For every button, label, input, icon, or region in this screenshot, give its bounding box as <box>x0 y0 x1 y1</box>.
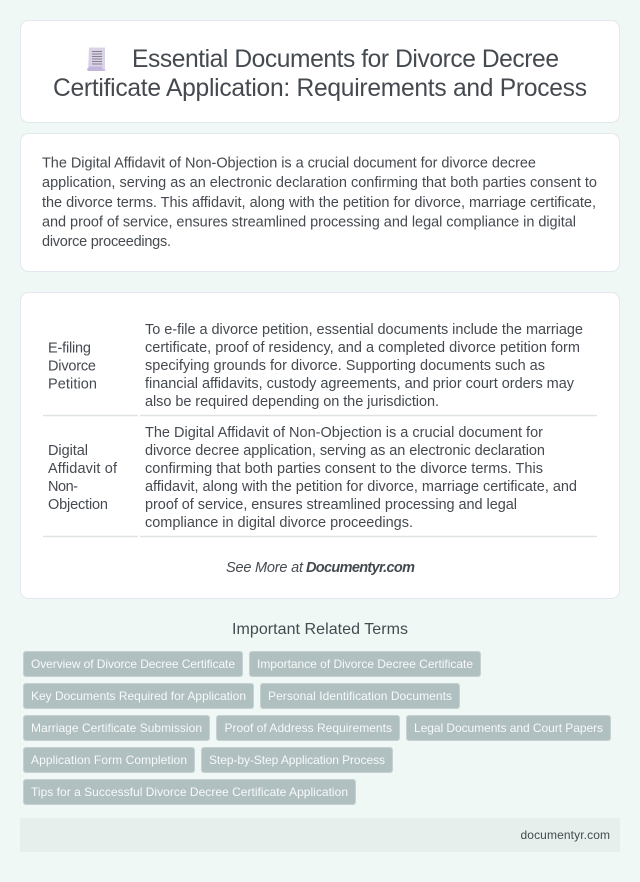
text block: introduction <box>42 156 597 250</box>
tag: Personal Identification Documents <box>260 684 460 708</box>
row text: E-filing Divorce Petition: also be required depending on the jurisdiction. <box>145 394 439 410</box>
title: Essential Documents for Divorce Decree <box>132 46 559 73</box>
row text: Digital Affidavit of Non-Objection: affidavit, along with the petition for divorce, marriage certificate, and <box>145 479 577 495</box>
row label: E-filing Divorce Petition: Petition <box>48 376 97 392</box>
row text: E-filing Divorce Petition: financial affidavits, custody agreements, and prior court orders may <box>145 376 575 392</box>
row label: Digital Affidavit of Non-Objection: Non- <box>48 479 78 495</box>
tag: Legal Documents and Court Papers <box>406 716 610 740</box>
row text: Digital Affidavit of Non-Objection: confirming that both parties consent to the divorce terms. This <box>145 461 543 477</box>
icon: document scroll <box>87 48 106 71</box>
tag: Tips for a Successful Divorce Decree Certificate Application <box>24 780 356 804</box>
row text: Digital Affidavit of Non-Objection <box>145 425 577 531</box>
tag: Overview of Divorce Decree Certificate <box>24 652 242 676</box>
see more link: Documentyr.com <box>306 560 415 576</box>
row label: Digital Affidavit of Non-Objection <box>48 443 118 513</box>
see more link: See More at <box>226 560 304 576</box>
row label: Digital Affidavit of Non-Objection: Affidavit of <box>48 461 118 477</box>
text block: introduction: and proof of service, ensures streamlined processing and legal compliance in digital <box>42 214 576 230</box>
row label: Digital Affidavit of Non-Objection: Objection <box>48 497 108 513</box>
tag: Application Form Completion: Application Form Completion <box>31 753 187 767</box>
row text: Digital Affidavit of Non-Objection: proof of service, ensures streamlined processing and legal <box>145 497 517 513</box>
panel: introduction <box>20 134 620 272</box>
panel: header <box>20 20 620 122</box>
tag: Personal Identification Documents: Personal Identification Documents <box>268 689 452 703</box>
text block: introduction: divorce proceedings. <box>42 234 171 250</box>
row label: E-filing Divorce Petition <box>48 340 97 392</box>
row text: E-filing Divorce Petition: certificate, proof of residency, and a completed divorce petition form <box>145 340 580 356</box>
tag: Marriage Certificate Submission <box>24 716 210 740</box>
tag: Proof of Address Requirements <box>216 716 400 740</box>
heading: Important Related Terms: Important Related Terms <box>232 621 408 638</box>
row text: E-filing Divorce Petition <box>145 322 583 410</box>
row label: E-filing Divorce Petition: Divorce <box>48 358 96 374</box>
tag: Proof of Address Requirements: Proof of Address Requirements <box>224 721 392 735</box>
row label: E-filing Divorce Petition: E-filing <box>48 340 91 356</box>
tag: Application Form Completion <box>24 748 194 772</box>
tag: Key Documents Required for Application: Key Documents Required for Application <box>31 689 246 703</box>
text block: introduction: the divorce terms. This affidavit, along with the petition for divorce, marriage certificate, <box>42 195 596 211</box>
row text: E-filing Divorce Petition: specifying grounds for divorce. Supporting documents such as <box>145 358 545 374</box>
tag: Overview of Divorce Decree Certificate: Overview of Divorce Decree Certificate <box>31 657 235 671</box>
text block: introduction: application, serving as an electronic declaration confirming that both parties consent to <box>42 175 597 191</box>
table row: E-filing Divorce Petition <box>43 322 597 416</box>
tag: Legal Documents and Court Papers: Legal Documents and Court Papers <box>414 721 603 735</box>
tag: Step-by-Step Application Process: Step-by-Step Application Process <box>209 753 385 767</box>
title <box>53 46 587 102</box>
tag: Key Documents Required for Application <box>24 684 254 708</box>
panel: documents table <box>20 292 620 598</box>
row text: Digital Affidavit of Non-Objection: compliance in digital divorce proceedings. <box>145 515 413 531</box>
tag: Importance of Divorce Decree Certificate <box>250 652 480 676</box>
see more link <box>226 560 415 576</box>
title: Certificate Application: Requirements and Process <box>53 75 587 102</box>
table row: Digital Affidavit of Non-Objection <box>43 425 597 536</box>
footer: documentyr.com <box>520 828 610 842</box>
row text: Digital Affidavit of Non-Objection: The Digital Affidavit of Non-Objection is a crucial document for <box>145 425 543 441</box>
footer <box>20 818 620 852</box>
text block: introduction: The Digital Affidavit of Non-Objection is a crucial document for divorce decree <box>42 156 536 172</box>
tag: Step-by-Step Application Process <box>202 748 392 772</box>
row text: E-filing Divorce Petition: To e-file a divorce petition, essential documents include the marriage <box>145 322 583 338</box>
row label: Digital Affidavit of Non-Objection: Digital <box>48 443 88 459</box>
tag: Tips for a Successful Divorce Decree Certificate Application: Tips for a Successful Divorce Decree Certificate Application <box>31 785 348 799</box>
row text: Digital Affidavit of Non-Objection: divorce decree application, serving as an electronic declaration <box>145 443 545 459</box>
tag: Marriage Certificate Submission: Marriage Certificate Submission <box>31 721 202 735</box>
tag: Importance of Divorce Decree Certificate: Importance of Divorce Decree Certificate <box>257 657 473 671</box>
related terms tags <box>24 652 610 804</box>
